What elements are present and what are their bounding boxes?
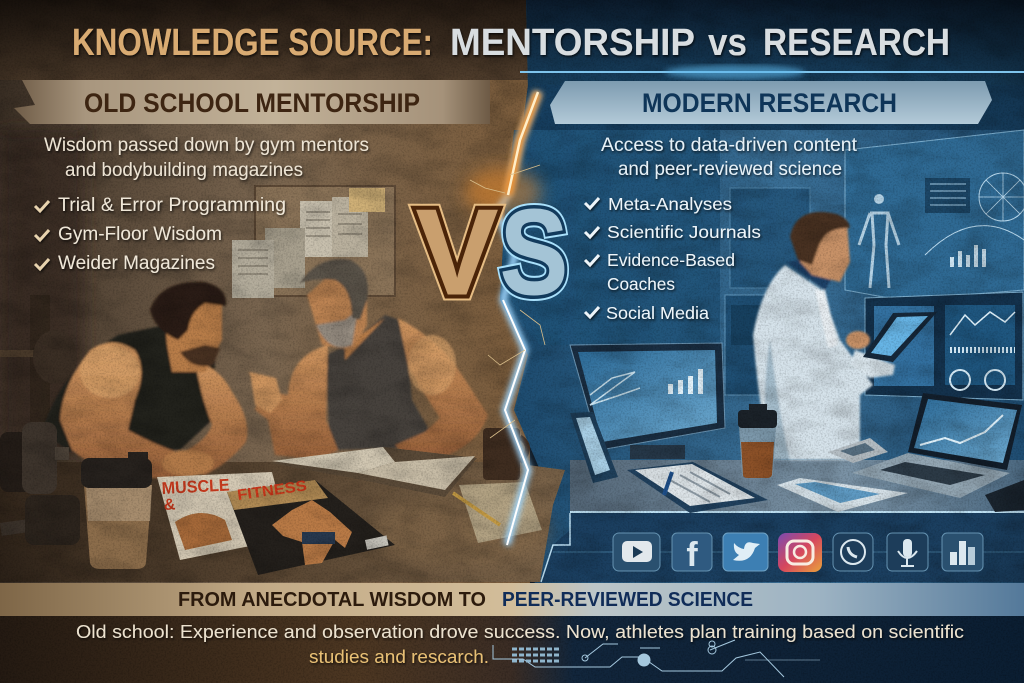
magazine: back cover: MUSCLE [161, 475, 230, 498]
title [72, 22, 950, 64]
right background [500, 0, 1024, 683]
VS emblem [416, 184, 568, 320]
title: vs [708, 22, 747, 64]
coffee mug [483, 428, 528, 480]
circuit decoration [493, 640, 820, 677]
left monitor [570, 343, 725, 459]
lab wall displays [725, 130, 1024, 395]
magazine: front cover: FITNESS [236, 477, 308, 504]
S letter: S [500, 184, 568, 320]
phone [570, 412, 618, 483]
bottom summary text: Old school: Experience and observation drove success. Now, athletes plan training based on scientific [76, 622, 964, 642]
banner: modern research: MODERN RESEARCH [642, 88, 897, 118]
clipboard [627, 462, 768, 513]
right checklist [585, 194, 761, 323]
banner: old school mentorship [14, 80, 490, 124]
bottom banner [0, 583, 1024, 616]
report [777, 478, 908, 512]
icon: Twitter [723, 533, 768, 571]
tablet [863, 312, 937, 362]
bottom banner: PEER-REVIEWED SCIENCE [502, 589, 753, 611]
notepad and pencil [453, 482, 542, 543]
open book [270, 447, 477, 497]
item: scientific journals: Scientific Journals [607, 222, 761, 242]
left intro text [44, 135, 369, 181]
shaker left [81, 452, 152, 569]
V letter: V [416, 184, 498, 320]
icon: Facebook: f [686, 536, 698, 574]
magazine: back cover: & [163, 496, 176, 514]
icon: YouTube [613, 533, 660, 571]
title: KNOWLEDGE SOURCE: [72, 22, 433, 64]
item: evidence-based coaches: Coaches [607, 274, 675, 294]
icon: phone call [833, 533, 873, 571]
title: MENTORSHIP [450, 22, 695, 64]
laptop [852, 393, 1022, 498]
item: social media: Social Media [606, 303, 709, 323]
man right [248, 259, 488, 460]
scientist [753, 212, 895, 460]
glow divider line [520, 65, 1024, 79]
left checklist [35, 195, 286, 274]
right monitor [865, 292, 1023, 400]
right intro text [601, 135, 858, 180]
item: evidence-based coaches: Evidence-Based [607, 250, 735, 270]
V letter: V [416, 184, 498, 320]
shaker right [738, 404, 777, 478]
bottom summary text [76, 622, 964, 667]
banner: modern research [550, 81, 992, 124]
left background [0, 0, 530, 683]
lightning bolt [465, 92, 545, 545]
magazine: back cover [157, 472, 290, 560]
right lab bench [540, 460, 1024, 582]
icon: Facebook [672, 533, 712, 574]
icon: bar chart [942, 533, 983, 571]
magazine: front cover [227, 477, 395, 575]
bottom summary text: studies and rescarch. [309, 647, 489, 667]
item: trial and error: Trial & Error Programming [58, 195, 286, 216]
left wooden table [0, 462, 565, 582]
icon: anatomy figure [859, 194, 899, 288]
bottom banner: FROM ANECDOTAL WISDOM TO [178, 589, 486, 611]
keyboard [985, 480, 1024, 512]
right intro text: Access to data-driven content [601, 135, 858, 156]
S letter: S [500, 184, 568, 320]
bottom panel [0, 615, 1024, 683]
social and media icons [613, 533, 983, 574]
corkboard with notes [232, 186, 395, 298]
icon: Instagram [778, 533, 822, 572]
title: RESEARCH [763, 22, 950, 64]
item: gym-floor wisdom: Gym-Floor Wisdom [58, 224, 222, 245]
left wall dumbbell rack [33, 330, 77, 384]
man left [42, 282, 247, 478]
icon: microphone [887, 533, 928, 571]
S letter: S [500, 184, 568, 320]
small tablet [828, 438, 888, 463]
dumbbell [0, 422, 80, 545]
item: weider magazines: Weider Magazines [58, 253, 215, 274]
V letter: V [416, 184, 498, 320]
left intro text: and bodybuilding magazines [65, 160, 303, 181]
item: meta-analyses: Meta-Analyses [608, 194, 732, 214]
item: evidence-based coaches [585, 250, 735, 294]
magazines [157, 472, 395, 575]
right intro text: and peer-reviewed science [618, 159, 842, 180]
left intro text: Wisdom passed down by gym mentors [44, 135, 369, 156]
banner: old school mentorship: OLD SCHOOL MENTORSHIP [84, 88, 420, 118]
